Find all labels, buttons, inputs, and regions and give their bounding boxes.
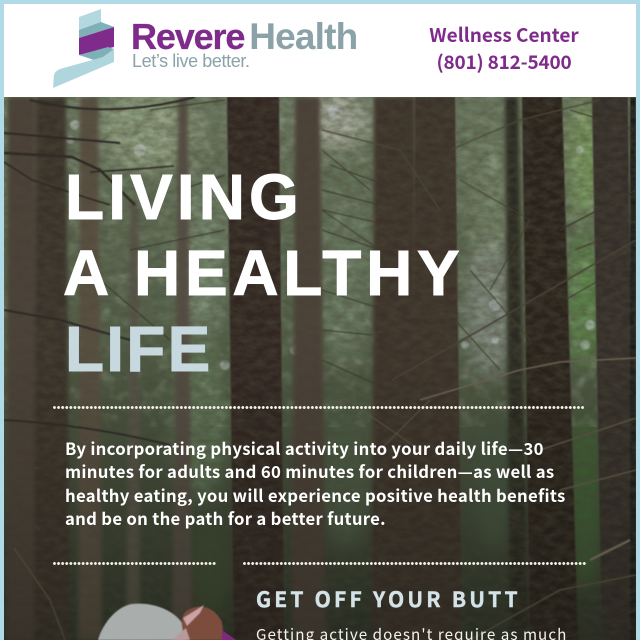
wordmark: RevereHealth <box>131 16 357 57</box>
title line 1: LIVING <box>65 161 303 233</box>
section heading: GET OFF YOUR BUTT <box>256 584 521 614</box>
dotted divider right <box>243 562 587 564</box>
intro paragraph <box>65 436 566 530</box>
title line 3: LIFE <box>65 313 212 385</box>
intro paragraph: healthy eating, you will experience positive health benefits <box>65 483 566 507</box>
intro paragraph: By incorporating physical activity into your daily life—30 <box>65 436 544 460</box>
icon: ribbon <box>53 9 114 88</box>
intro paragraph: minutes for adults and 60 minutes for children—as well as <box>65 459 554 483</box>
center name: Wellness Center <box>429 20 579 48</box>
top border <box>0 0 640 4</box>
woman stretching <box>98 604 236 640</box>
title line 2: A HEALTHY <box>63 237 464 309</box>
dark overlay on lower photo <box>4 340 636 640</box>
phone number: (801) 812-5400 <box>436 48 572 74</box>
side borders <box>0 0 4 640</box>
dotted divider left <box>53 562 216 564</box>
contact block <box>429 20 579 74</box>
title: Living a Healthy Life <box>63 161 464 385</box>
logo: Revere Health <box>53 9 357 88</box>
tagline: Let’s live better. <box>132 51 250 71</box>
header band <box>4 4 636 97</box>
tree trunks <box>6 97 528 640</box>
intro paragraph: and be on the path for a better future. <box>65 506 386 530</box>
dotted divider <box>53 406 584 408</box>
